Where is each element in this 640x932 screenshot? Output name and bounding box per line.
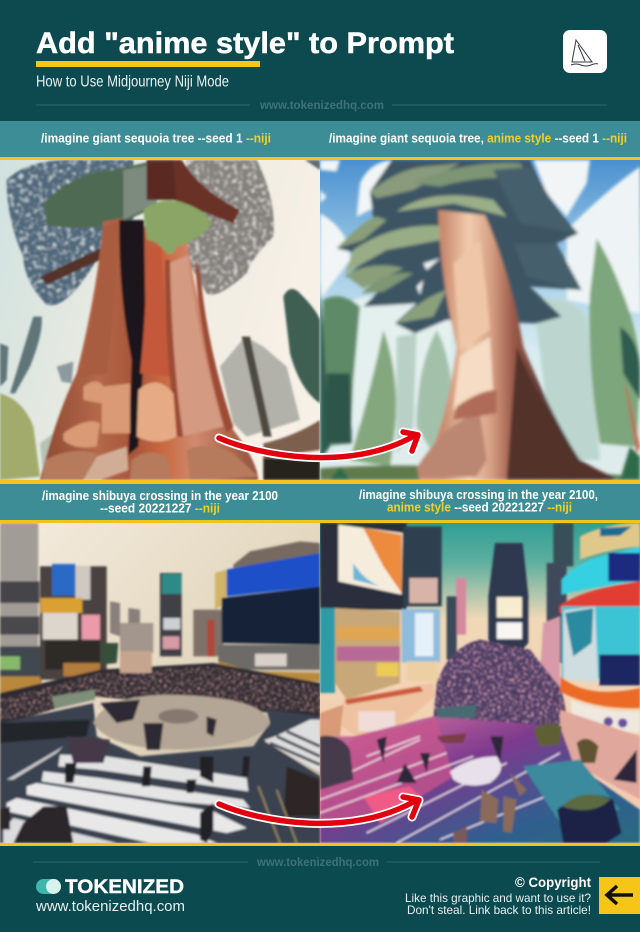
prompt text left: /imagine shibuya crossing in the year 2100 [42, 489, 278, 503]
icon: Midjourney sailboat logo [563, 30, 607, 73]
prompt band: sequoia [0, 121, 640, 160]
prompt text right: /imagine giant sequoia tree, anime style --seed 1 --niji [329, 132, 627, 146]
prompt text left [42, 489, 278, 516]
copyright note: Don't steal. Link back to this article! [407, 903, 591, 917]
brand url: www.tokenizedhq.com [35, 898, 185, 915]
image: anime Shibuya crossing [320, 523, 640, 843]
arrow: Shibuya comparison [219, 797, 419, 823]
title: Add "anime style" to Prompt [36, 27, 454, 60]
copyright heading: © Copyright [515, 875, 591, 890]
image: anime sequoia [320, 160, 640, 480]
footer panel [0, 843, 640, 932]
prompt text right: anime style --seed 20221227 --niji [387, 500, 572, 514]
prompt band: shibuya [0, 480, 640, 523]
icon: Tokenized logo mark [36, 879, 61, 894]
image: realistic sequoia [0, 160, 320, 480]
watermark url: www.tokenizedhq.com [259, 98, 384, 112]
image: realistic Shibuya crossing [0, 523, 320, 843]
brand name: TOKENIZED [65, 877, 184, 898]
copyright note: Like this graphic and want to use it? [405, 891, 591, 905]
watermark url: www.tokenizedhq.com [256, 855, 379, 869]
copyright note [405, 891, 591, 917]
icon: yellow back arrow box [599, 877, 640, 914]
arrow: sequoia comparison [219, 432, 418, 458]
subtitle: How to Use Midjourney Niji Mode [36, 74, 229, 90]
header panel [0, 0, 640, 121]
prompt text right [359, 488, 598, 514]
prompt text left: --seed 20221227 --niji [100, 502, 220, 516]
title underline [36, 61, 260, 67]
prompt text left: /imagine giant sequoia tree --seed 1 --niji [41, 132, 271, 146]
prompt text right: /imagine shibuya crossing in the year 2100, [359, 488, 598, 502]
